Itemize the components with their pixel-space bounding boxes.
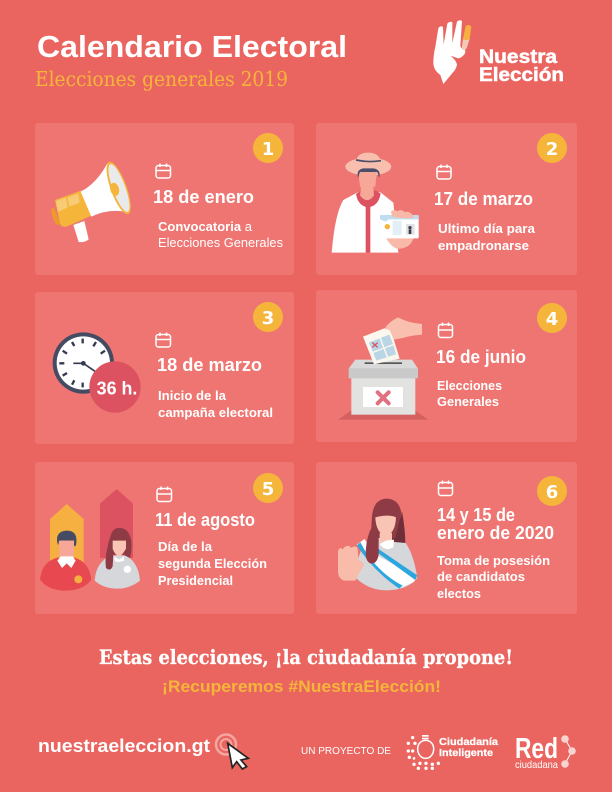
number badge 2: [537, 133, 567, 163]
logo: Red ciudadana: Red: [515, 733, 558, 765]
number badge 1: 1: [262, 139, 274, 160]
description: de candidatos: [437, 569, 525, 584]
description: Convocatoria a: [158, 219, 253, 234]
icon: calendar: [157, 486, 172, 502]
description: segunda Elección: [158, 556, 267, 571]
date: [437, 505, 554, 543]
description: [158, 539, 267, 588]
number badge 6: 6: [546, 482, 558, 503]
description: [158, 388, 273, 420]
description: Presidencial: [158, 573, 233, 588]
website link: nuestraeleccion.gt: [38, 735, 210, 756]
title: Calendario Electoral: [37, 29, 347, 64]
date: 18 de marzo: [157, 355, 262, 375]
icon: woman with presidential sash: [338, 499, 417, 590]
description: Inicio de la: [158, 388, 227, 403]
hashtag line: ¡Recuperemos #NuestraElección!: [162, 677, 441, 696]
icon: man with hat holding ID card: [332, 153, 419, 253]
slogan: Estas elecciones, ¡la ciudadanía propone!: [99, 646, 513, 669]
icon: ballot box and hand: [338, 317, 428, 420]
project credit: UN PROYECTO DE: [301, 746, 391, 757]
panel 4: elecciones generales: [316, 290, 577, 442]
description: electos: [437, 586, 481, 601]
logo: Ciudadanía Inteligente: Ciudadanía: [439, 736, 498, 748]
date: enero de 2020: [437, 523, 554, 543]
number badge 2: 2: [546, 139, 558, 160]
icon: calendar: [437, 164, 451, 179]
description: Ultimo día para: [438, 221, 536, 236]
panel 2: empadronamiento: [316, 123, 577, 275]
description: Elecciones Generales: [158, 235, 283, 250]
description: [437, 378, 502, 409]
description: campaña electoral: [158, 405, 273, 420]
logo: Nuestra Elección: Elección: [479, 65, 564, 86]
description: [158, 219, 283, 250]
date: 18 de enero: [153, 187, 254, 207]
description: Generales: [437, 394, 499, 409]
icon: clock with 36 h. badge: 36 h.: [97, 378, 137, 399]
logo: Ciudadanía Inteligente: [407, 735, 498, 770]
description: [438, 221, 536, 253]
panel 6: toma de posesión: [316, 462, 577, 614]
number badge 4: [537, 303, 567, 333]
number badge 5: 5: [262, 479, 274, 500]
date: 16 de junio: [436, 347, 526, 367]
panel 1: convocatoria: [35, 123, 294, 275]
icon: calendar: [438, 322, 452, 338]
number badge 3: [253, 302, 283, 332]
number badge 3: 3: [262, 308, 274, 329]
panel 3: campaña: [35, 292, 294, 444]
date: 17 de marzo: [434, 189, 533, 209]
icon: two candidates with arrows: [40, 489, 140, 591]
logo: Nuestra Elección: Nuestra: [479, 47, 557, 68]
icon: megaphone: [51, 159, 136, 242]
description: Día de la: [158, 539, 213, 554]
number badge 6: [537, 476, 567, 506]
icon: cursor click: [216, 734, 248, 769]
icon: calendar: [438, 480, 452, 496]
description: [437, 553, 550, 601]
description: Toma de posesión: [437, 553, 550, 568]
subtitle: Elecciones generales 2019: [35, 67, 288, 91]
number badge 1: [253, 133, 283, 163]
logo: Nuestra Elección: [433, 20, 564, 86]
icon: calendar: [156, 164, 170, 178]
description: Elecciones: [437, 378, 502, 393]
logo: Ciudadanía Inteligente: Inteligente: [439, 747, 493, 759]
panel 5: segunda elección: [35, 462, 294, 614]
date: 14 y 15 de: [437, 505, 515, 525]
number badge 4: 4: [546, 309, 558, 330]
icon: clock with 36 h. badge: [53, 332, 141, 413]
icon: calendar: [156, 332, 170, 347]
date: 11 de agosto: [155, 510, 255, 530]
description: empadronarse: [438, 238, 529, 253]
number badge 5: [253, 473, 283, 503]
logo: Red ciudadana: ciudadana: [515, 759, 558, 771]
